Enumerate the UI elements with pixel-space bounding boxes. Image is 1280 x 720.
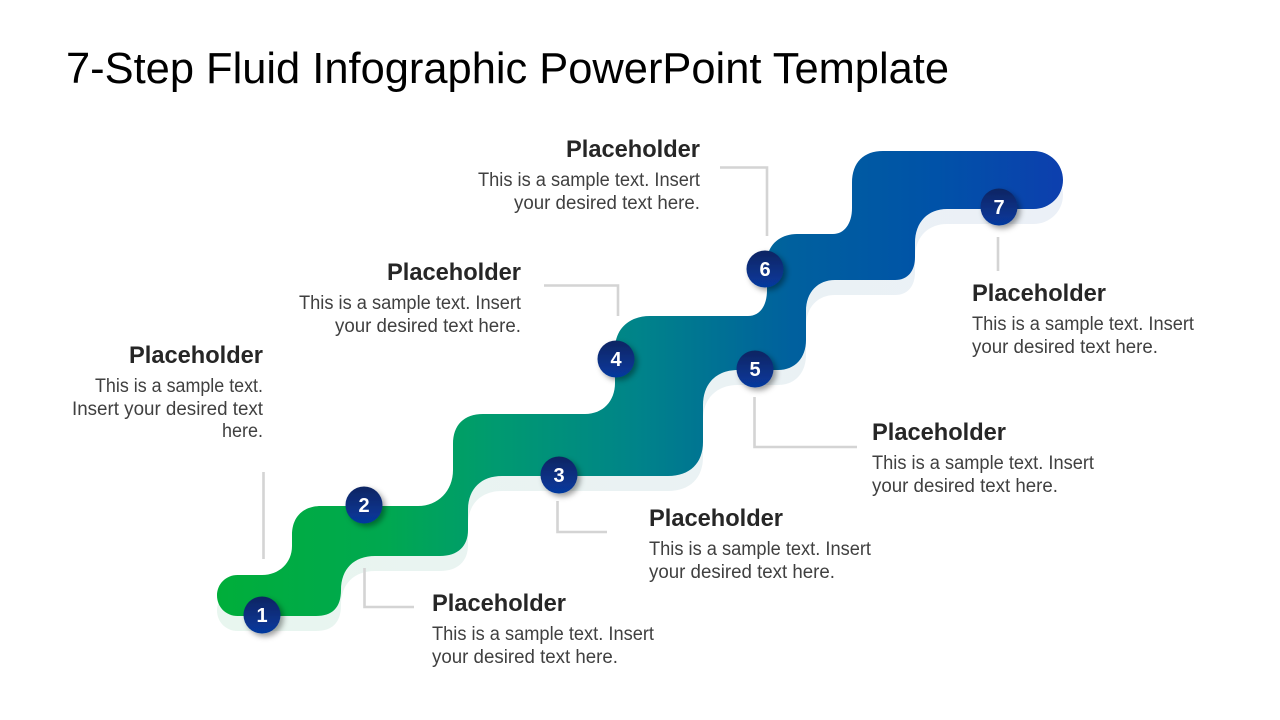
- text block: step 4: [299, 259, 522, 337]
- badge 2: [346, 486, 382, 524]
- text block: step 1: here.: [222, 421, 263, 442]
- connector: step 3: [558, 501, 607, 532]
- text block: step 6: This is a sample text. Insert: [478, 170, 701, 191]
- badge 2: 2: [358, 495, 370, 517]
- title: 7-Step Fluid Infographic PowerPoint Template: [66, 44, 949, 93]
- badge 4: 4: [610, 349, 622, 371]
- badge 7: [980, 188, 1018, 226]
- text block: step 6: [478, 136, 701, 214]
- text block: step 3: your desired text here.: [649, 562, 835, 583]
- text block: step 3: This is a sample text. Insert: [649, 539, 872, 560]
- text block: step 7: This is a sample text. Insert: [972, 314, 1195, 335]
- text block: step 7: your desired text here.: [972, 337, 1158, 358]
- fluid stepped ribbon: [217, 151, 1063, 616]
- text block: step 6: Placeholder: [566, 136, 700, 163]
- text block: step 2: [432, 590, 655, 668]
- badge 5: [736, 350, 774, 388]
- text block: step 7: Placeholder: [972, 280, 1106, 307]
- text block: step 3: [649, 505, 872, 583]
- badge 6: 6: [759, 259, 771, 281]
- text block: step 4: This is a sample text. Insert: [299, 293, 522, 314]
- connector: step 6: [720, 168, 767, 236]
- connector: step 5: [754, 397, 857, 447]
- text block: step 1: [72, 342, 264, 442]
- text block: step 5: This is a sample text. Insert: [872, 453, 1095, 474]
- badge 7: 7: [993, 197, 1005, 219]
- badge 3: 3: [553, 465, 565, 487]
- text block: step 2: Placeholder: [432, 590, 566, 617]
- connector: step 1: [262, 472, 265, 559]
- text block: step 5: your desired text here.: [872, 476, 1058, 497]
- badge 6: [746, 250, 784, 288]
- text block: step 1: Placeholder: [129, 342, 263, 369]
- connector: step 4: [544, 286, 618, 316]
- text block: step 2: your desired text here.: [432, 647, 618, 668]
- text block: step 1: Insert your desired text: [72, 399, 264, 420]
- badge 1: 1: [256, 605, 268, 627]
- text block: step 5: Placeholder: [872, 419, 1006, 446]
- text block: step 6: your desired text here.: [514, 193, 700, 214]
- connector: step 7: [997, 237, 999, 271]
- badge 5: 5: [749, 359, 761, 381]
- text block: step 4: your desired text here.: [335, 316, 521, 337]
- text block: step 2: This is a sample text. Insert: [432, 624, 655, 645]
- text block: step 3: Placeholder: [649, 505, 783, 532]
- text block: step 7: [972, 280, 1195, 358]
- text block: step 4: Placeholder: [387, 259, 521, 286]
- fluid shadow: [217, 166, 1063, 631]
- text block: step 1: This is a sample text.: [95, 376, 263, 397]
- badge 3: [540, 456, 578, 494]
- text block: step 5: [872, 419, 1095, 497]
- badge 1: [244, 596, 280, 634]
- badge 4: [598, 340, 634, 378]
- connector: step 2: [364, 568, 414, 607]
